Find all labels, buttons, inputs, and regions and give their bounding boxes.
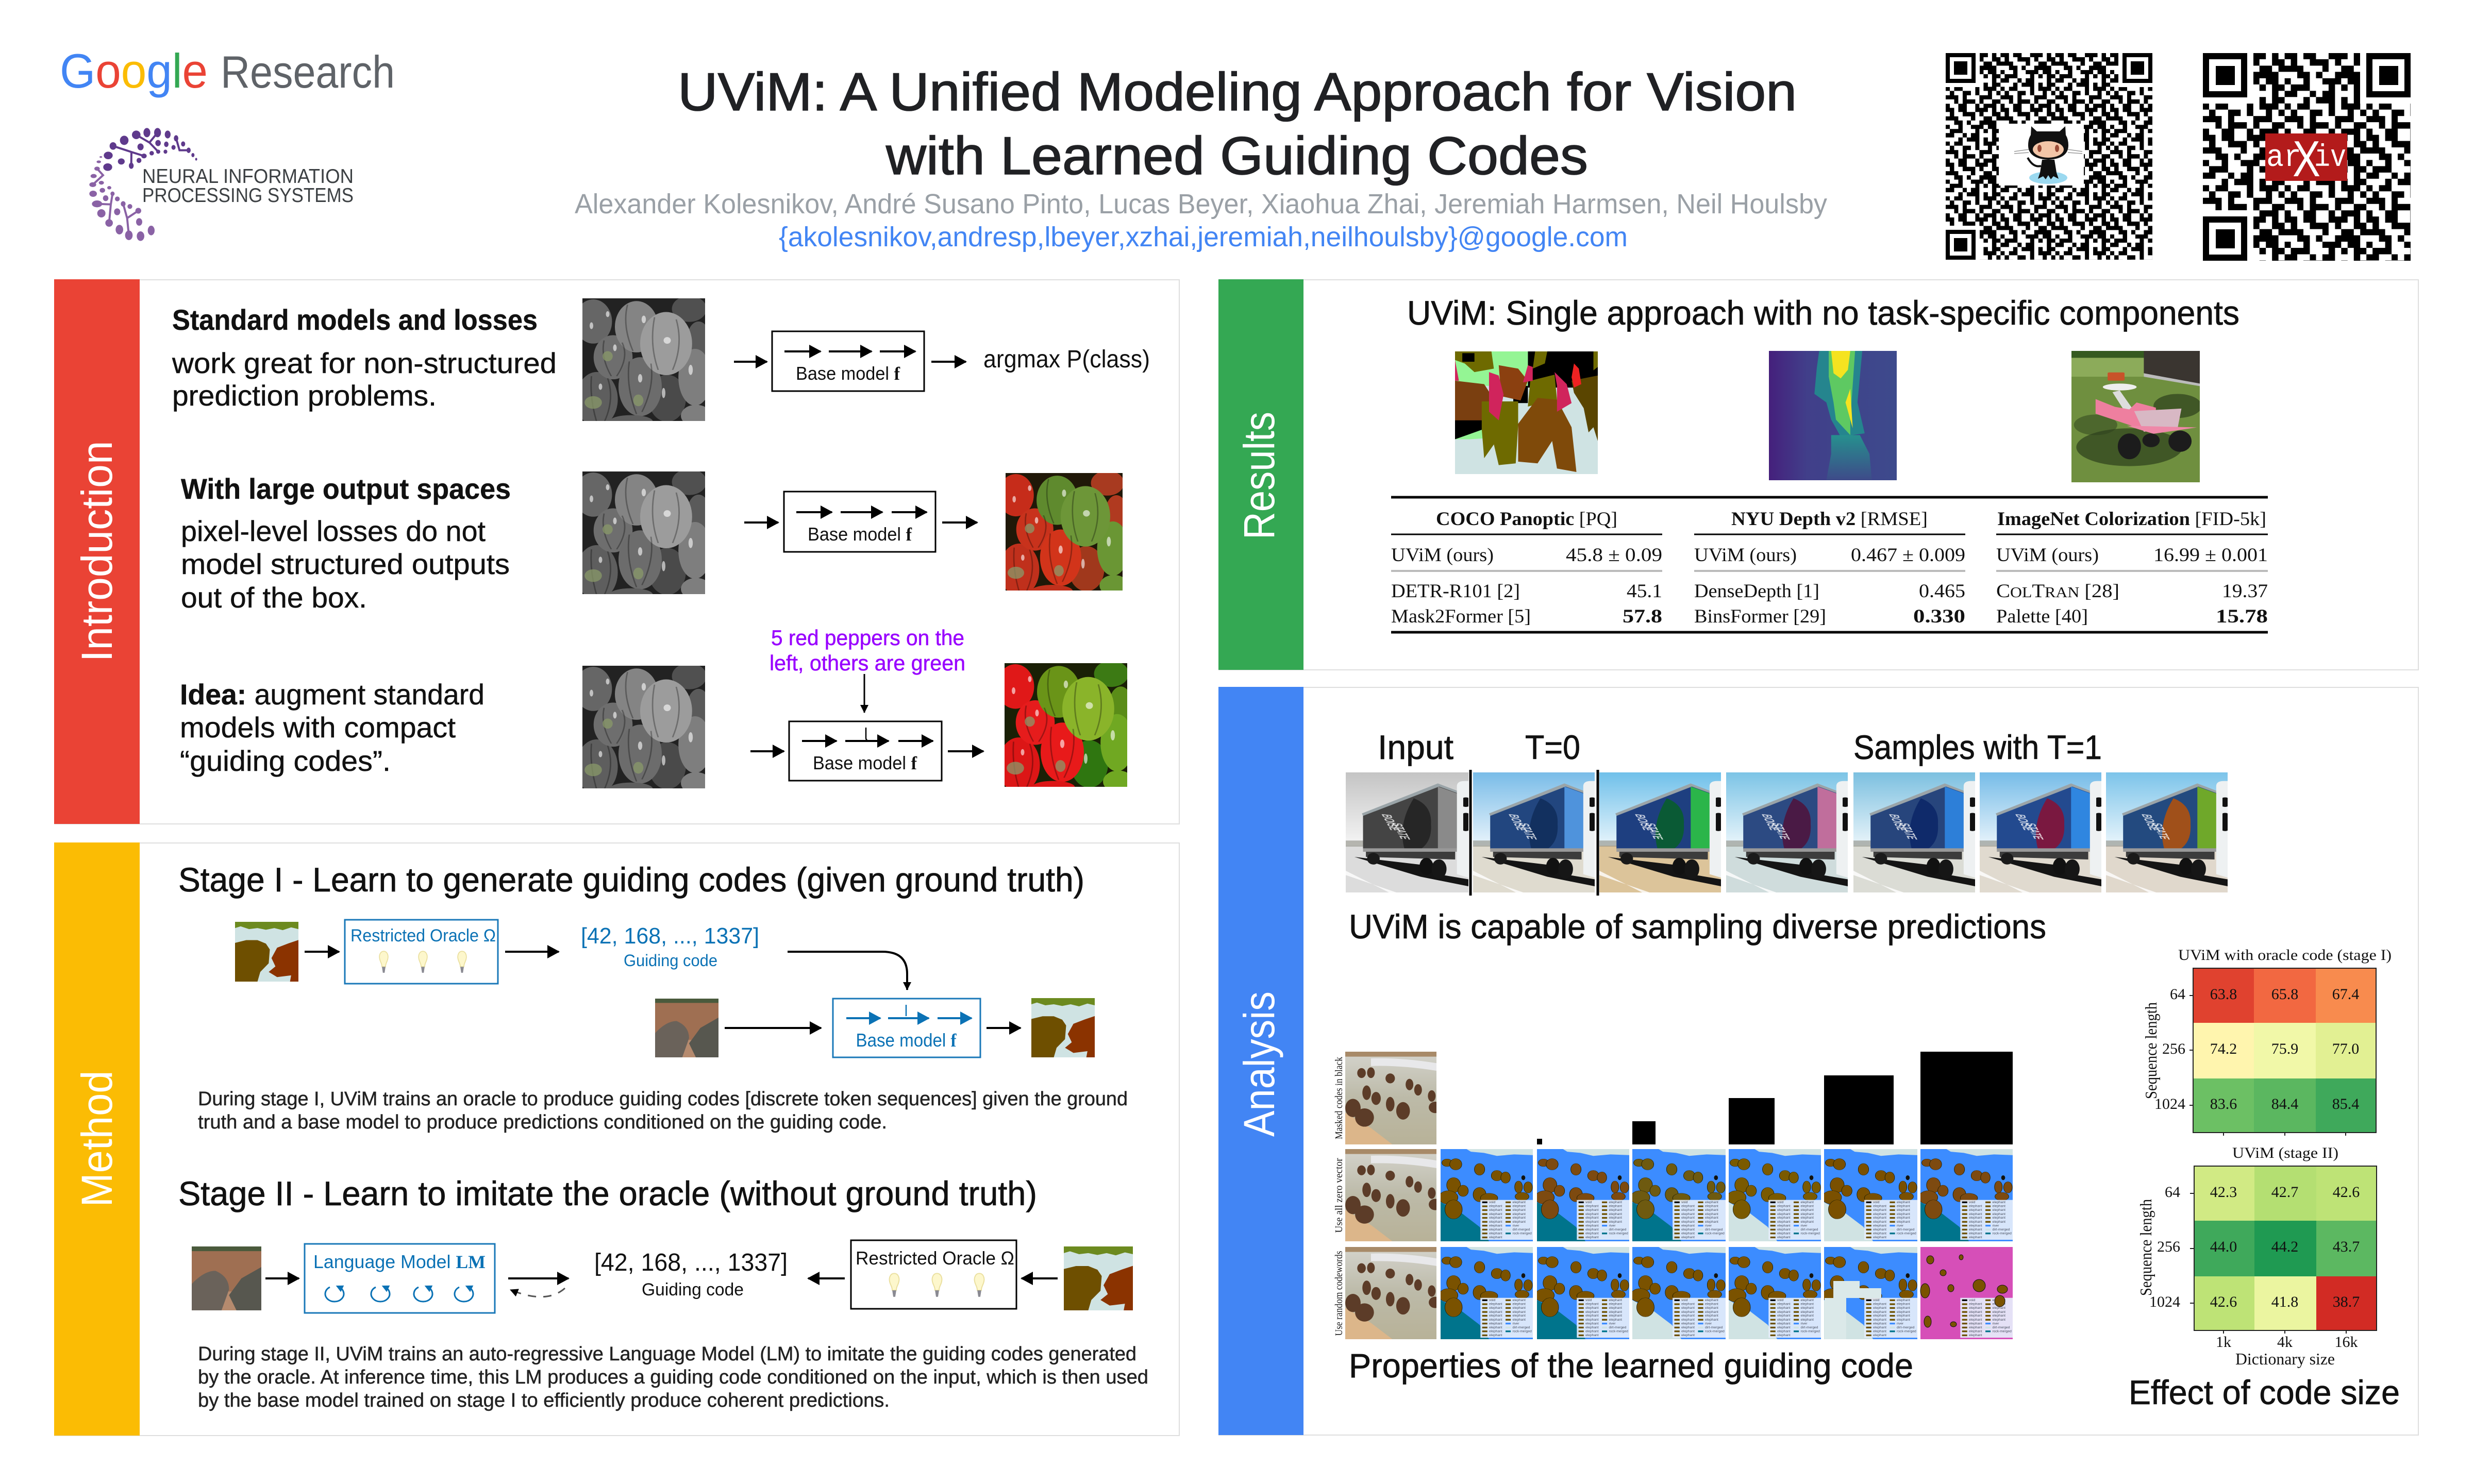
logo: Google Research: Research — [221, 46, 395, 97]
column: NYU Depth: 0.330 — [1913, 606, 1965, 627]
image: grayscale peppers 3 — [575, 663, 712, 795]
text block: stage II description: by the oracle. At inference time, this LM produces a guiding code conditioned on the input, which is then used — [198, 1367, 1148, 1388]
row labels: Use random codewords — [1333, 1251, 1345, 1336]
heatmap: stage II: 42.6 — [2210, 1293, 2237, 1310]
image: panoptic segmentation — [1455, 351, 1598, 474]
column: ImageNet Colorization: COLTRAN [28] — [1996, 581, 2119, 602]
heatmap: stage II: Dictionary size — [2235, 1350, 2335, 1368]
text block: stage II description — [198, 1343, 1148, 1411]
box: language model — [305, 1244, 495, 1313]
column: ImageNet Colorization: 16.99 ± 0.001 — [2153, 545, 2268, 566]
column: NYU Depth: BinsFormer [29] — [1694, 606, 1826, 627]
arXiv badge: ar — [2266, 141, 2301, 176]
column: COCO Panoptic — [1391, 509, 1662, 627]
text: guiding code tokens: [42, 168, ..., 1337] — [594, 1249, 788, 1276]
column: COCO Panoptic: 45.8 ± 0.09 — [1566, 545, 1662, 566]
row labels: Masked codes in black — [1333, 1057, 1345, 1139]
text block: large output spaces: model structured outputs — [181, 548, 510, 580]
column: COCO Panoptic: COCO Panoptic [PQ] — [1436, 509, 1617, 530]
title: UViM: A Unified Modeling Approach for Vision — [678, 62, 1797, 122]
heatmap: oracle code stage I: 85.4 — [2332, 1095, 2359, 1112]
text block: stage I description: truth and a base model to produce predictions conditioned on the guiding code. — [198, 1111, 887, 1133]
column labels: trucks: Input — [1378, 728, 1453, 766]
logo wordmark: NEURAL INFORMATION — [142, 165, 354, 188]
authors: Alexander Kolesnikov, André Susano Pinto, Lucas Beyer, Xiaohua Zhai, Jeremiah Harmsen, Neil Houlsby — [575, 189, 1827, 220]
heatmap: oracle code stage I: 67.4 — [2332, 986, 2359, 1003]
arXiv badge: X — [2293, 130, 2320, 187]
text block: large output spaces: out of the box. — [181, 581, 367, 614]
heatmap: stage II: 44.0 — [2210, 1238, 2237, 1255]
text block: stage I description: During stage I, UViM trains an oracle to produce guiding codes [discrete token sequences] given the ground — [198, 1088, 1128, 1110]
heatmap: stage II: 16k — [2335, 1334, 2358, 1351]
heatmap: oracle code stage I: Sequence length — [2142, 1002, 2160, 1099]
QR code: arXiv — [2203, 53, 2411, 261]
icon: octocat — [2014, 126, 2082, 184]
text block: stage II description: by the base model trained on stage I to efficiently produce coherent predictions. — [198, 1390, 890, 1411]
text block: idea — [180, 678, 484, 777]
text: guiding code tokens — [594, 1249, 788, 1300]
text block: idea: “guiding codes”. — [180, 745, 391, 777]
text block: stage II description: During stage II, UViM trains an auto-regressive Language Model (LM) to imitate the guiding codes generated — [198, 1343, 1136, 1365]
text: guiding code tokens: Guiding code — [642, 1280, 744, 1300]
text block: large output spaces: pixel-level losses do not — [181, 515, 486, 547]
diagram: base model classification: argmax P(class) — [983, 346, 1150, 373]
arXiv badge: iv — [2314, 141, 2346, 176]
column: NYU Depth: UViM (ours) — [1694, 545, 1797, 566]
column: NYU Depth: NYU Depth v2 [RMSE] — [1731, 509, 1928, 530]
text block: large output spaces: With large output spaces — [181, 473, 511, 505]
heatmap: stage II — [2136, 1144, 2377, 1368]
heatmap: oracle code stage I: UViM with oracle code (stage I) — [2178, 947, 2392, 964]
title — [678, 62, 1797, 186]
text: guiding code tokens: Guiding code — [624, 951, 717, 970]
row: random codewords — [1345, 1247, 2013, 1339]
image: grayscale peppers 2 — [575, 469, 712, 601]
text block: stage I description — [198, 1088, 1128, 1133]
heatmap: oracle code stage I: 64 — [2170, 986, 2185, 1003]
heatmap: stage II: 42.3 — [2210, 1184, 2237, 1201]
row labels — [1333, 1057, 1345, 1336]
column: COCO Panoptic: DETR-R101 [2] — [1391, 581, 1520, 602]
text block: standard models: work great for non-structured — [172, 347, 557, 379]
diagram: guided base model: Base model f — [813, 752, 917, 773]
heatmap: oracle code stage I — [2142, 947, 2392, 1136]
QR code: GitHub — [1946, 53, 2152, 260]
row: all-zero vector — [1345, 1149, 2013, 1241]
heatmap: stage II: 64 — [2165, 1184, 2180, 1201]
heatmap: oracle code stage I: 74.2 — [2210, 1040, 2237, 1057]
column: COCO Panoptic: 45.1 — [1627, 581, 1662, 602]
heatmap: oracle code stage I: 1024 — [2154, 1095, 2185, 1112]
diagram: base model per pixel: Base model f — [808, 524, 912, 545]
image: elephants — [655, 999, 718, 1057]
column: NYU Depth — [1694, 509, 1965, 627]
heatmap: stage II: 1024 — [2149, 1293, 2180, 1310]
box: restricted oracle — [345, 920, 498, 984]
sidebar heading: Introduction: Introduction — [73, 441, 121, 662]
diagram: stage I — [235, 920, 1095, 1057]
heatmap: stage II: 44.2 — [2271, 1238, 2298, 1255]
column labels: trucks — [1378, 728, 2102, 766]
column labels: trucks: Samples with T=1 — [1853, 728, 2102, 766]
image: colorized cart photo — [2071, 351, 2200, 482]
heading: stage II: Stage II - Learn to imitate the oracle (without ground truth) — [178, 1174, 1037, 1212]
text block: idea: models with compact — [180, 711, 456, 744]
callout: guiding description: 5 red peppers on the — [771, 626, 964, 650]
column: ImageNet Colorization: UViM (ours) — [1996, 545, 2099, 566]
arXiv badge — [2265, 130, 2347, 187]
logo: Google Research: Google — [60, 44, 208, 98]
box: restricted oracle: Restricted Oracle Ω — [856, 1247, 1014, 1269]
heatmap: stage II: UViM (stage II) — [2232, 1144, 2338, 1161]
callout: guiding description — [770, 626, 965, 675]
text: guiding code tokens: [42, 168, ..., 1337] — [581, 923, 759, 949]
column: ImageNet Colorization: 19.37 — [2222, 581, 2268, 602]
heatmap: oracle code stage I: 77.0 — [2332, 1040, 2359, 1057]
text block: standard models: Standard models and losses — [172, 303, 538, 336]
heading: stage I: Stage I - Learn to generate guiding codes (given ground truth) — [178, 861, 1084, 899]
image: depth map — [1769, 351, 1897, 480]
caption: diverse predictions: UViM is capable of sampling diverse predictions — [1349, 907, 2046, 946]
heatmap: oracle code stage I: 65.8 — [2271, 986, 2298, 1003]
diagram: base model per pixel — [744, 492, 977, 552]
diagram: base model classification — [734, 331, 1150, 391]
caption: effect of code size: Effect of code size — [2129, 1373, 2400, 1411]
heading: single approach: UViM: Single approach with no task-specific components — [1407, 294, 2239, 332]
image strip: truck colorization samples — [1346, 770, 2228, 896]
heatmap: stage II: 38.7 — [2333, 1293, 2360, 1310]
heatmap: stage II: 42.6 — [2333, 1184, 2360, 1201]
box: language model: Language Model LM — [313, 1251, 486, 1272]
text: guiding code tokens — [581, 923, 759, 970]
column: NYU Depth: 0.465 — [1919, 581, 1965, 602]
caption: learned guiding code: Properties of the learned guiding code — [1349, 1346, 1913, 1385]
panel: Analysis — [1218, 687, 2418, 1435]
heatmap: oracle code stage I: 75.9 — [2271, 1040, 2298, 1057]
column: COCO Panoptic: UViM (ours) — [1391, 545, 1494, 566]
text block: standard models — [172, 303, 557, 412]
column labels: trucks: T=0 — [1525, 728, 1580, 766]
sidebar heading: Analysis: Analysis — [1235, 991, 1283, 1137]
panel: Results — [1218, 279, 2418, 670]
logo: NeurIPS — [89, 128, 354, 241]
column: COCO Panoptic: Mask2Former [5] — [1391, 606, 1531, 627]
heatmap: stage II: 4k — [2277, 1334, 2293, 1351]
heatmap: stage II: 41.8 — [2271, 1293, 2298, 1310]
title: with Learned Guiding Codes — [885, 126, 1588, 186]
column: ImageNet Colorization — [1996, 509, 2268, 627]
heatmap: oracle code stage I: 84.4 — [2271, 1095, 2298, 1112]
heatmap: stage II: Sequence length — [2136, 1199, 2155, 1296]
callout: guiding description: left, others are green — [770, 651, 965, 675]
image: grayscale peppers 1 — [575, 296, 712, 428]
heatmap: stage II: 42.7 — [2271, 1184, 2298, 1201]
logo dots — [89, 128, 197, 241]
image: segmentation output — [1031, 998, 1095, 1057]
column: NYU Depth: 0.467 ± 0.009 — [1851, 545, 1965, 566]
diagram: guided base model — [750, 674, 983, 781]
image: segmentation input — [235, 922, 298, 982]
email addresses: {akolesnikov,andresp,lbeyer,xzhai,jeremiah,neilhoulsby}@google.com — [779, 222, 1628, 252]
sidebar heading: Method: Method — [73, 1071, 121, 1207]
panel: Introduction — [54, 279, 1179, 824]
image: colorized peppers, mixed colours — [998, 470, 1129, 597]
image: segmentation target — [1064, 1246, 1133, 1310]
text block: large output spaces — [181, 473, 511, 614]
column: NYU Depth: DenseDepth [1] — [1694, 581, 1819, 602]
text block: idea: Idea: augment standard — [180, 678, 484, 711]
heatmap: stage II: 256 — [2157, 1238, 2180, 1255]
sidebar heading: Results: Results — [1235, 412, 1283, 539]
box: restricted oracle: Restricted Oracle Ω — [350, 926, 496, 946]
logo wordmark: PROCESSING SYSTEMS — [142, 184, 354, 207]
heatmap: oracle code stage I: 256 — [2162, 1040, 2185, 1057]
heatmap: oracle code stage I: 83.6 — [2210, 1095, 2237, 1112]
heatmap: oracle code stage I: 63.8 — [2210, 986, 2237, 1003]
column: ImageNet Colorization: 15.78 — [2216, 606, 2268, 627]
image: colorized peppers, guided — [997, 661, 1134, 794]
figure: learned guiding code properties — [1333, 1052, 2013, 1339]
diagram: base model classification: Base model f — [796, 363, 900, 384]
heatmap: stage II: 1k — [2216, 1334, 2231, 1351]
logo wordmark — [142, 165, 354, 207]
image: elephants input — [192, 1246, 261, 1310]
table: results — [1391, 497, 2268, 632]
text block: standard models: prediction problems. — [172, 379, 437, 412]
column: ImageNet Colorization: Palette [40] — [1996, 606, 2088, 627]
column: COCO Panoptic: 57.8 — [1623, 606, 1662, 627]
box: base model — [833, 999, 980, 1057]
column: ImageNet Colorization: ImageNet Colorization [FID-5k] — [1997, 509, 2266, 530]
logo: Google Research — [60, 44, 395, 98]
panel: Method — [54, 842, 1179, 1436]
diagram: stage II — [192, 1240, 1133, 1313]
heatmap: stage II: 43.7 — [2333, 1238, 2360, 1255]
row: masked codes — [1345, 1052, 2013, 1144]
box: restricted oracle — [851, 1240, 1016, 1309]
row labels: Use all zero vector — [1333, 1158, 1345, 1233]
box: base model: Base model f — [856, 1030, 957, 1051]
